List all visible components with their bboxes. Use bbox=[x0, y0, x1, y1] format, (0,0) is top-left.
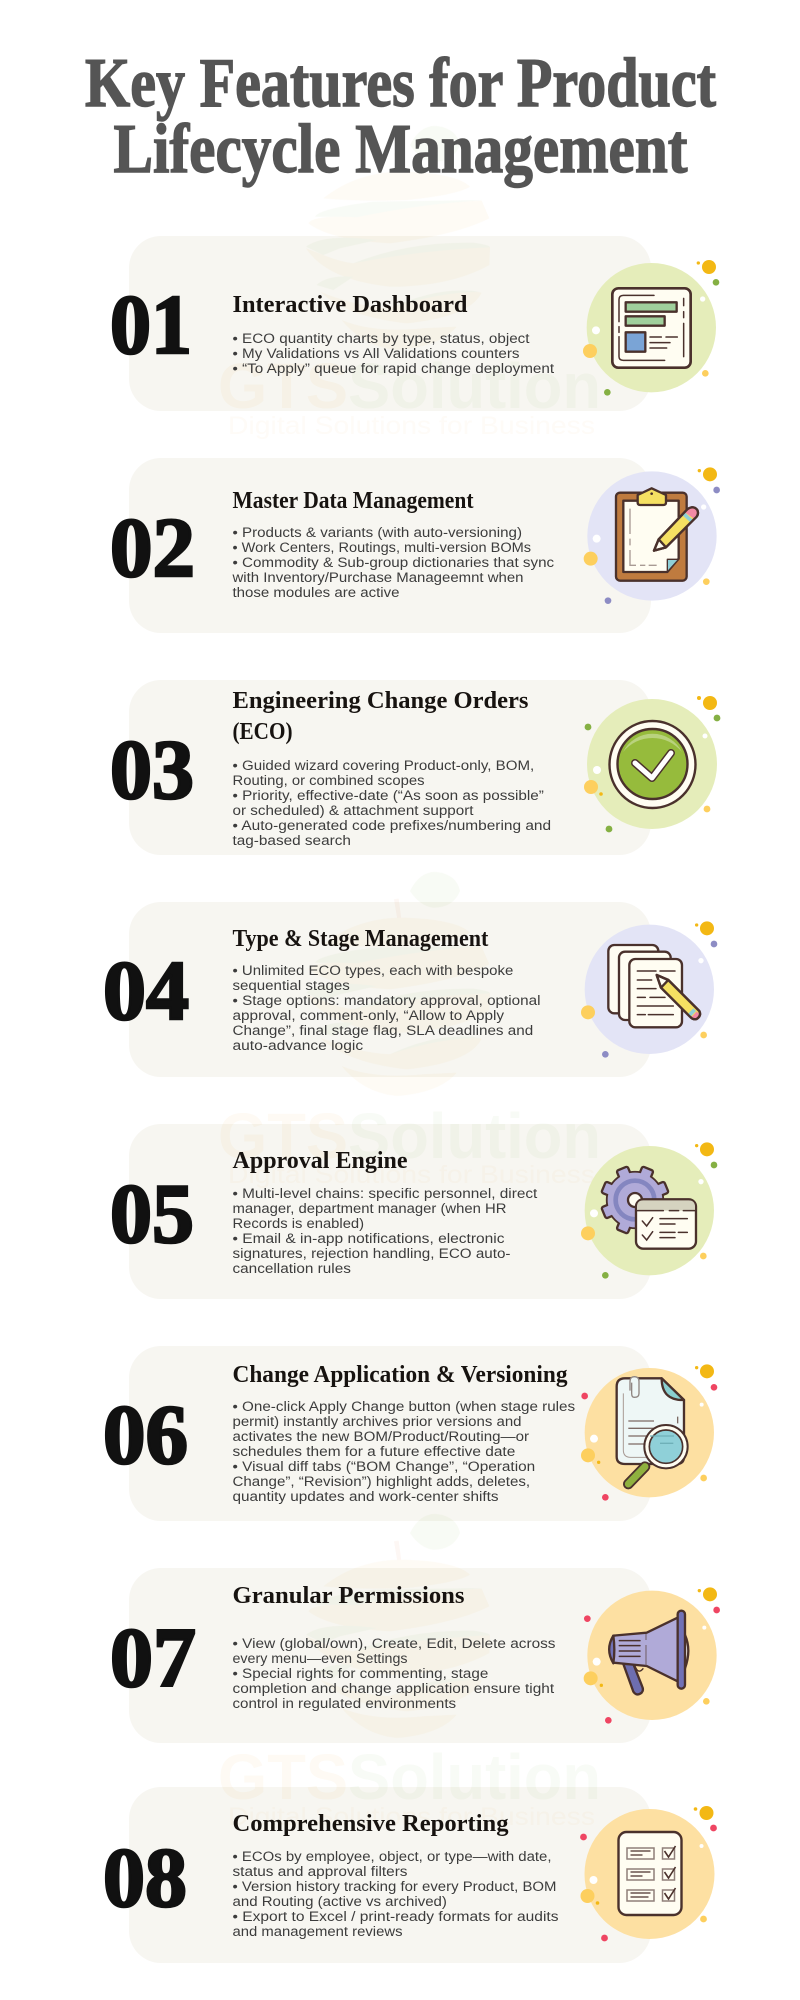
body text: Routing, or combined scopes bbox=[232, 773, 425, 788]
body text bbox=[232, 331, 554, 376]
card background bbox=[129, 236, 651, 411]
body text: quantity updates and work-center shifts bbox=[232, 1489, 499, 1504]
body text: Records is enabled) bbox=[232, 1216, 364, 1231]
body text: completion and change application ensure tight bbox=[232, 1681, 554, 1696]
panel: 03 Engineering Change Orders bbox=[110, 680, 720, 855]
heading bbox=[232, 688, 528, 745]
icon: megaphone bbox=[584, 1587, 720, 1724]
number 02: 02 bbox=[110, 501, 195, 595]
body text: every menu—even Settings bbox=[232, 1651, 408, 1666]
body text: with Inventory/Purchase Manageemnt when bbox=[231, 570, 524, 585]
watermark: middle logo: Digital Solutions for Business bbox=[228, 1161, 595, 1189]
card background bbox=[129, 1346, 651, 1521]
panel: 01 Interactive Dashboard bbox=[110, 236, 719, 411]
body text: • Special rights for commenting, stage bbox=[232, 1666, 488, 1681]
body text: signatures, rejection handling, ECO auto- bbox=[232, 1246, 510, 1261]
watermark: top logo bbox=[218, 126, 601, 440]
body text bbox=[232, 963, 540, 1053]
card background bbox=[129, 902, 651, 1077]
body text bbox=[231, 525, 554, 600]
body text: approval, comment-only, “Allow to Apply bbox=[232, 1008, 504, 1023]
number 05: 05 bbox=[110, 1167, 194, 1261]
heading: Comprehensive Reporting bbox=[232, 1811, 508, 1837]
body text: Change”, “Revision”) highlight adds, deletes, bbox=[232, 1474, 530, 1489]
watermark: bottom logo: Digital Solutions for Business bbox=[228, 1803, 595, 1831]
icon: clipboard and pencil bbox=[584, 467, 720, 604]
icon: documents and pencil bbox=[581, 921, 717, 1058]
body text: • Multi-level chains: specific personnel, direct bbox=[232, 1186, 538, 1201]
watermark: top logo: GTSSolution bbox=[218, 350, 601, 422]
heading: (ECO) bbox=[232, 719, 292, 745]
body text: • ECO quantity charts by type, status, object bbox=[232, 331, 530, 346]
body text bbox=[232, 1636, 556, 1711]
body text: sequential stages bbox=[232, 978, 350, 993]
body text: or scheduled) & attachment support bbox=[232, 803, 474, 818]
heading: Type & Stage Management bbox=[232, 926, 488, 952]
body text: cancellation rules bbox=[232, 1261, 351, 1276]
body text: • Auto-generated code prefixes/numbering and bbox=[232, 818, 551, 833]
card background bbox=[129, 1568, 651, 1743]
card background bbox=[129, 1787, 651, 1963]
watermark: bottom logo: GTSSolution bbox=[218, 1741, 601, 1813]
panel: 02 Master Data Management bbox=[110, 458, 720, 633]
heading: Approval Engine bbox=[232, 1148, 408, 1174]
body text: auto-advance logic bbox=[232, 1038, 363, 1053]
number 06: 06 bbox=[103, 1388, 188, 1482]
card background bbox=[129, 680, 651, 855]
number 03: 03 bbox=[110, 723, 194, 817]
body text: activates the new BOM/Product/Routing—or bbox=[232, 1429, 530, 1444]
body text: those modules are active bbox=[232, 585, 400, 600]
number 07: 07 bbox=[110, 1611, 196, 1705]
body text: • One-click Apply Change button (when stage rules bbox=[232, 1399, 575, 1414]
body text bbox=[232, 1186, 538, 1276]
body text: control in regulated environments bbox=[232, 1696, 456, 1711]
body text: • Export to Excel / print-ready formats for audits bbox=[232, 1909, 559, 1924]
number 04: 04 bbox=[103, 944, 189, 1038]
body text: Change”, final stage flag, SLA deadlines and bbox=[232, 1023, 533, 1038]
icon: document and magnifier bbox=[581, 1364, 717, 1501]
body text bbox=[232, 1849, 559, 1939]
body text: tag-based search bbox=[232, 833, 351, 848]
icon: dashboard bbox=[583, 260, 719, 396]
panel: 04 Type and Stage Management bbox=[103, 902, 717, 1077]
card background bbox=[129, 1124, 651, 1299]
heading: Granular Permissions bbox=[232, 1583, 464, 1609]
body text bbox=[232, 1399, 575, 1504]
body text: • My Validations vs All Validations counters bbox=[232, 346, 520, 361]
body text: permit) instantly archives prior versions and bbox=[232, 1414, 522, 1429]
body text: and Routing (active vs archived) bbox=[232, 1894, 447, 1909]
heading: Interactive Dashboard bbox=[232, 292, 468, 318]
body text: • Priority, effective-date (“As soon as possible” bbox=[232, 788, 544, 803]
body text: • Visual diff tabs (“BOM Change”, “Operation bbox=[232, 1459, 535, 1474]
watermark: middle logo: GTSSolution bbox=[218, 1100, 601, 1172]
watermark: middle logo bbox=[218, 872, 601, 1189]
body text: manager, department manager (when HR bbox=[232, 1201, 507, 1216]
panel: 05 Approval Engine bbox=[110, 1124, 717, 1299]
body text: • Version history tracking for every Product, BOM bbox=[232, 1879, 556, 1894]
body text: • Unlimited ECO types, each with bespoke bbox=[232, 963, 513, 978]
body text: • “To Apply” queue for rapid change deployment bbox=[232, 361, 554, 376]
body text: • Guided wizard covering Product-only, BOM, bbox=[232, 758, 534, 773]
body text bbox=[232, 758, 551, 848]
heading: Master Data Management bbox=[232, 488, 474, 514]
body text: • Commodity & Sub-group dictionaries that sync bbox=[232, 555, 554, 570]
body text: • ECOs by employee, object, or type—with date, bbox=[232, 1849, 552, 1864]
body text: schedules them for a future effective date bbox=[232, 1444, 515, 1459]
icon: check badge bbox=[584, 696, 720, 832]
body text: • Stage options: mandatory approval, optional bbox=[232, 993, 540, 1008]
icon: gear and checklist bbox=[581, 1142, 717, 1279]
title bbox=[85, 45, 716, 188]
body text: • Work Centers, Routings, multi-version BOMs bbox=[232, 540, 531, 555]
body text: and management reviews bbox=[232, 1924, 403, 1939]
body text: • Email & in-app notifications, electronic bbox=[232, 1231, 505, 1246]
body text: • Products & variants (with auto-versioning) bbox=[232, 525, 522, 540]
number 01: 01 bbox=[110, 278, 192, 372]
watermark: top logo: Digital Solutions for Business bbox=[228, 412, 595, 440]
panel: 06 Change Application and Versioning bbox=[103, 1346, 717, 1521]
title: Lifecycle Management bbox=[114, 111, 688, 188]
number 08: 08 bbox=[103, 1831, 187, 1925]
body text: status and approval filters bbox=[232, 1864, 408, 1879]
panel: 07 Granular Permissions bbox=[110, 1568, 720, 1743]
heading: Engineering Change Orders bbox=[232, 688, 528, 714]
card background bbox=[129, 458, 651, 633]
body text: • View (global/own), Create, Edit, Delete across bbox=[232, 1636, 556, 1651]
panel: 08 Comprehensive Reporting bbox=[103, 1787, 717, 1963]
icon: report checklist bbox=[580, 1806, 717, 1941]
watermark: bottom logo bbox=[218, 1514, 601, 1831]
heading: Change Application & Versioning bbox=[232, 1362, 568, 1388]
